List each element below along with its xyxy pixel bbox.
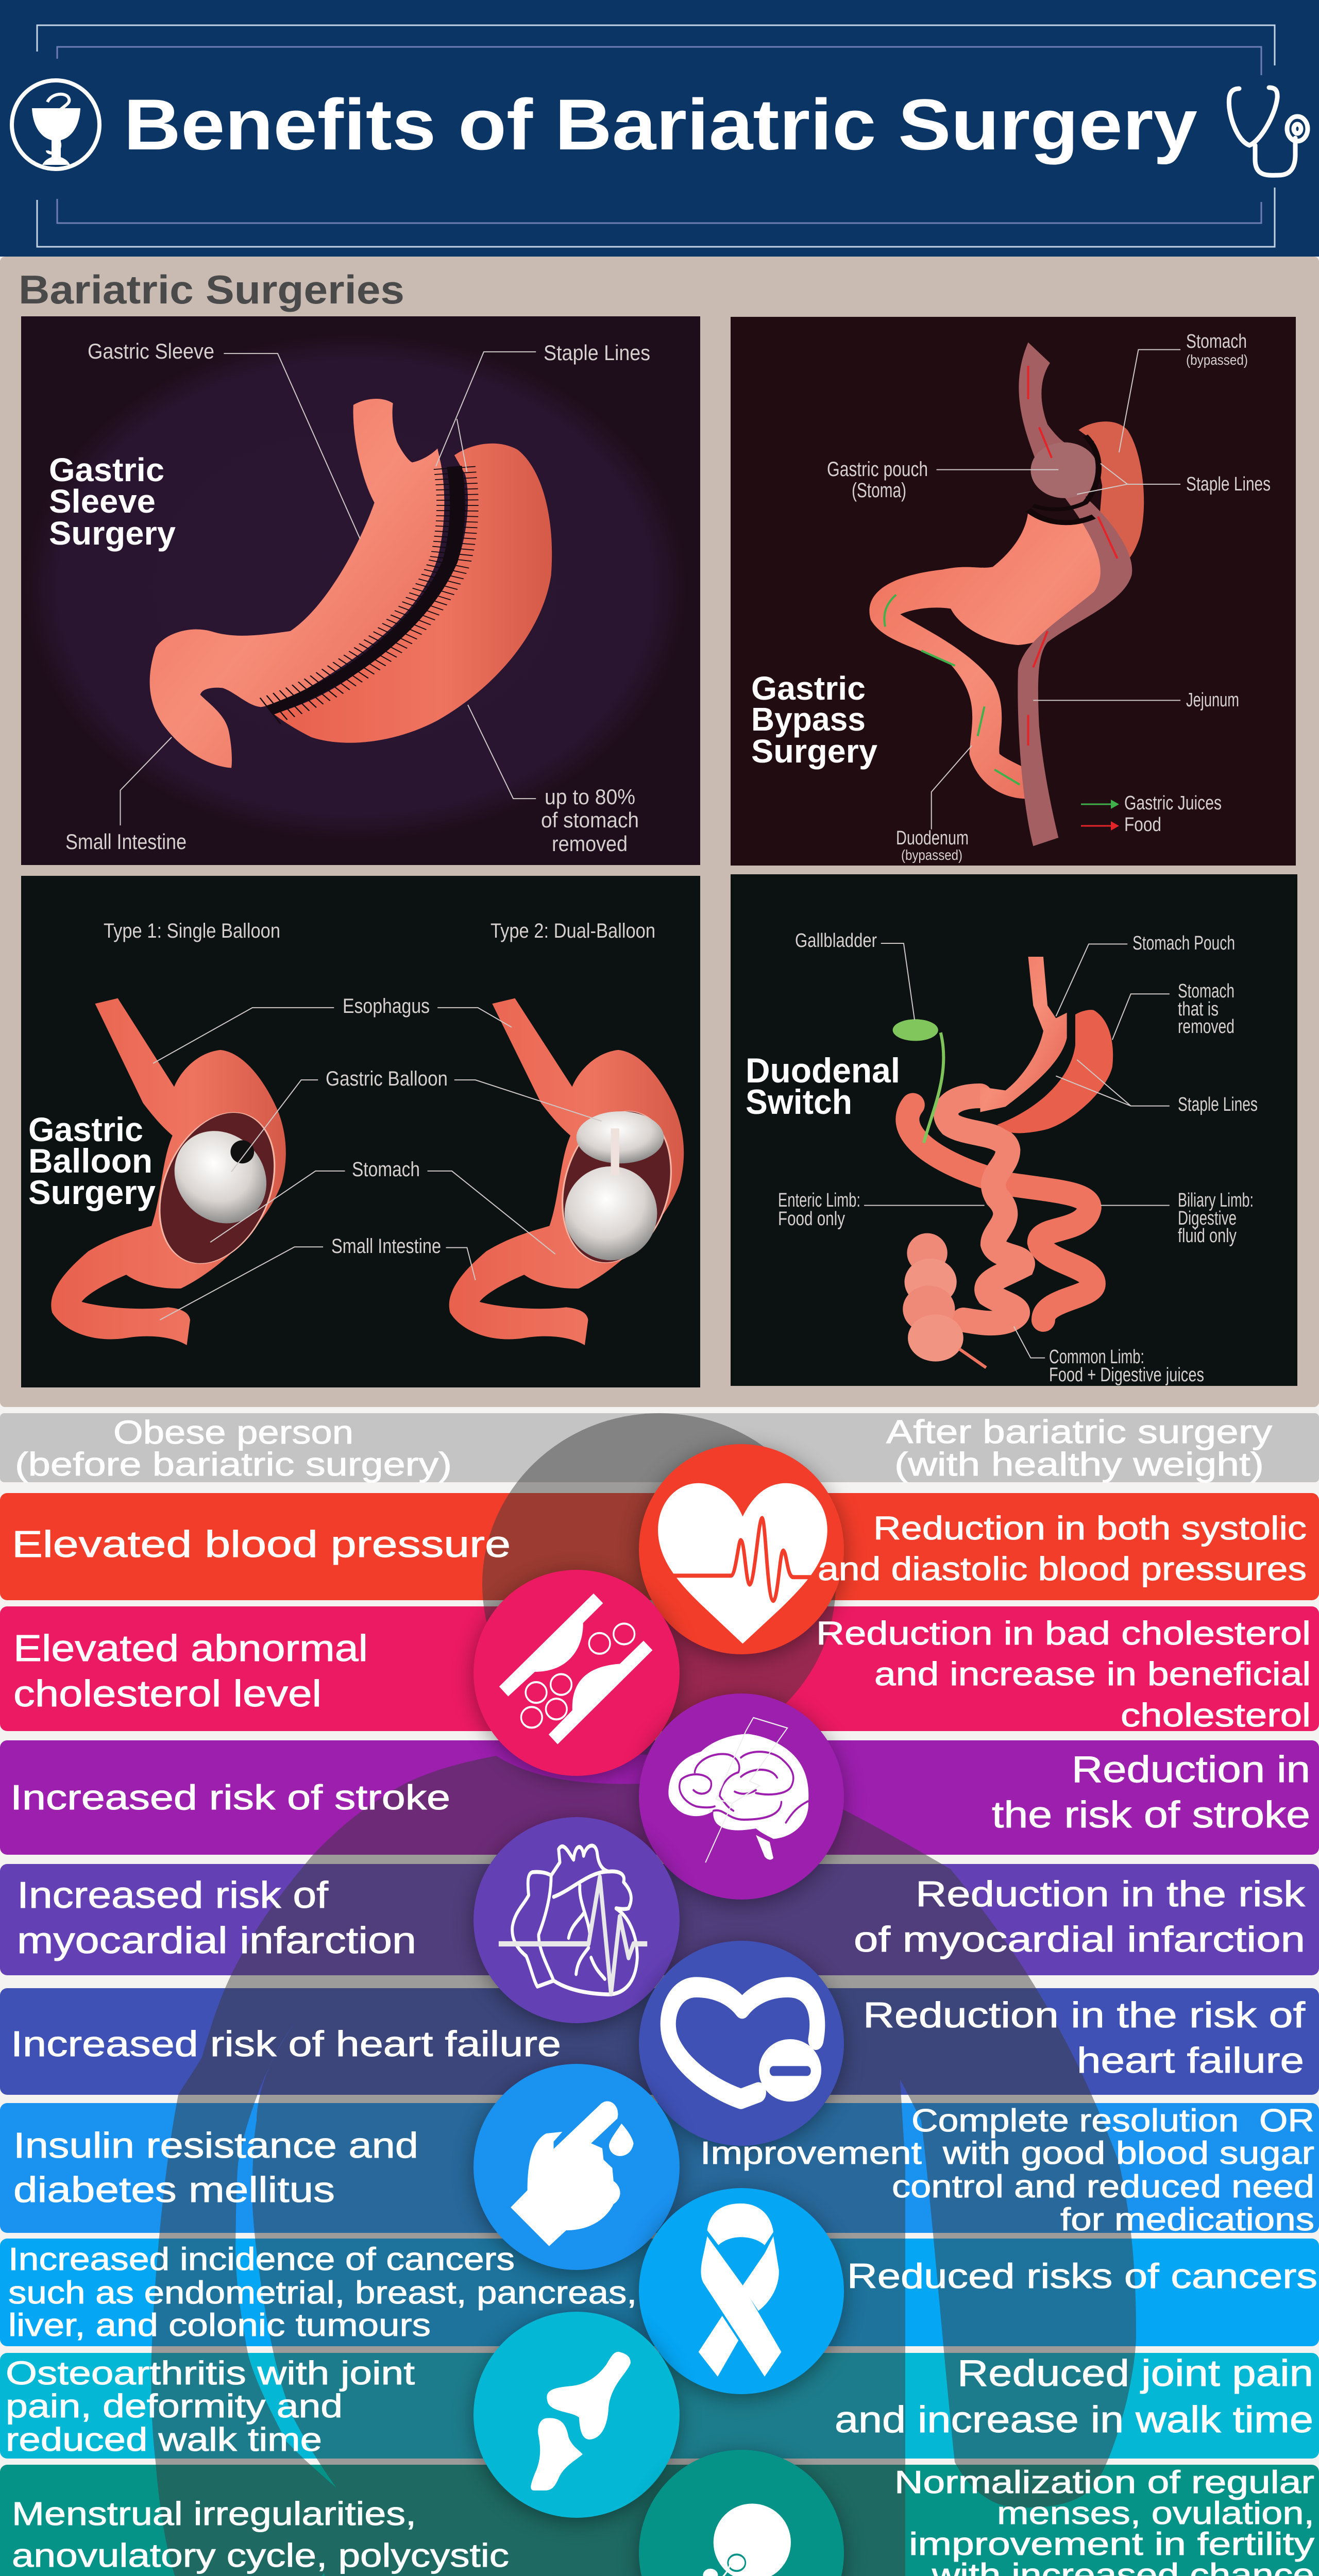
panel: gastric bypass surgery — [731, 317, 1296, 866]
column heading: obese person: (before bariatric surgery) — [15, 1446, 452, 1483]
legend: gastric juices and food — [1081, 792, 1222, 836]
icon: anatomical heart — [499, 1845, 647, 1994]
labels: sleeve: removed — [552, 832, 628, 856]
row 1: blood pressure: Elevated blood pressure — [12, 1524, 511, 1565]
heading: gastric sleeve surgery: Gastric — [49, 451, 164, 488]
callouts: duodenal leader lines — [864, 943, 1170, 1358]
icon: brain with lightning — [668, 1718, 808, 1862]
row 2: cholesterol: cholesterol level — [13, 1673, 322, 1715]
labels: duodenal switch: Enteric Limb: — [778, 1190, 860, 1211]
icon: finger prick with blood drop — [511, 2102, 634, 2246]
heading: gastric sleeve surgery — [49, 451, 176, 552]
labels: bypass: (bypassed) — [901, 847, 962, 863]
labels: bypass: Gastric pouch — [827, 458, 928, 481]
header banner — [0, 0, 1319, 257]
heading: gastric bypass surgery: Surgery — [751, 733, 877, 770]
labels: bypass: (Stoma) — [852, 479, 906, 502]
labels: balloon: Stomach — [352, 1158, 420, 1181]
title: Benefits of Bariatric Surgery — [124, 84, 1197, 165]
row 8: osteoarthritis: Osteoarthritis with joint — [6, 2354, 415, 2392]
circle: cancers — [639, 2188, 844, 2394]
circle: osteoarthritis — [474, 2312, 680, 2518]
row 6: diabetes: for medications — [1060, 2202, 1314, 2238]
row 6: diabetes: Complete resolution OR — [911, 2103, 1314, 2139]
row 9: menstrual and fertility — [12, 2465, 1314, 2576]
column heading: obese person: Obese person — [113, 1414, 353, 1451]
row 4: myocardial infarction — [17, 1874, 1306, 1961]
row 6: diabetes: Improvement with good blood sugar — [700, 2136, 1314, 2171]
circle: fertility — [639, 2450, 844, 2576]
row 8: osteoarthritis: reduced walk time — [6, 2421, 322, 2458]
panel: gastric balloon surgery — [21, 876, 700, 1387]
labels: duodenal switch: Stomach Pouch — [1132, 933, 1235, 954]
icon: heart with minus — [668, 1987, 821, 2102]
labels: bypass: Jejunum — [1186, 689, 1239, 711]
row 1: blood pressure — [12, 1510, 1307, 1587]
row 6: diabetes — [13, 2103, 1314, 2238]
row 2: cholesterol: Reduction in bad cholesterol — [816, 1615, 1311, 1652]
illustration: duodenal switch intestines — [893, 957, 1113, 1368]
circle: blood pressure — [639, 1444, 844, 1654]
circle: heart failure — [639, 1941, 844, 2146]
circle: cholesterol — [474, 1570, 680, 1776]
labels: sleeve: Gastric Sleeve — [88, 339, 214, 363]
labels: duodenal switch: Food only — [778, 1208, 845, 1230]
labels: bypass: (bypassed) — [1186, 352, 1248, 368]
circle: stroke — [639, 1693, 844, 1900]
row 2: cholesterol: Elevated abnormal — [13, 1628, 368, 1669]
heading: duodenal switch: Duodenal — [746, 1051, 900, 1090]
column heading: after bariatric surgery: After bariatric surgery — [886, 1413, 1272, 1450]
comparison column header band — [0, 1413, 1319, 1482]
heading: gastric balloon surgery — [28, 1110, 156, 1211]
row 9: menstrual and fertility: Menstrual irregularities, — [12, 2495, 416, 2532]
row 8: osteoarthritis: pain, deformity and — [6, 2387, 343, 2425]
heading: bariatric surgeries: Bariatric Surgeries — [19, 267, 404, 312]
row 5: heart failure: Reduction in the risk of — [863, 1995, 1306, 2035]
heading: gastric balloon surgery: Balloon — [28, 1142, 153, 1180]
labels: bypass: Duodenum — [896, 827, 969, 849]
row 4: myocardial infarction: myocardial infarction — [17, 1920, 416, 1961]
column heading: obese person — [15, 1414, 452, 1483]
labels: duodenal switch: Common Limb: — [1049, 1346, 1144, 1368]
labels: duodenal switch: Digestive — [1178, 1208, 1237, 1229]
icon: clogged artery — [499, 1594, 652, 1744]
illustration: sleeve stomach — [150, 399, 552, 768]
row 8: osteoarthritis — [6, 2353, 1313, 2458]
body silhouette — [151, 1413, 1136, 2576]
icon: heart with ecg — [644, 1483, 827, 1643]
labels: duodenal switch: Biliary Limb: — [1178, 1190, 1254, 1211]
row 2: cholesterol: and increase in beneficial — [874, 1655, 1311, 1692]
icon: egg and sperm — [679, 2503, 791, 2576]
row 4: myocardial infarction: Increased risk of — [17, 1875, 329, 1916]
row 9: menstrual and fertility: Normalization of regular — [894, 2465, 1314, 2500]
row 9: menstrual and fertility: menses, ovulation, — [997, 2496, 1314, 2531]
row 2: cholesterol — [13, 1615, 1311, 1734]
row 7: cancers: liver, and colonic tumours — [8, 2308, 431, 2343]
labels: sleeve: Small Intestine — [65, 829, 187, 854]
row 9: menstrual and fertility: improvement in fertility — [909, 2527, 1314, 2562]
labels: duodenal switch: Food + Digestive juices — [1049, 1364, 1204, 1386]
icon: knee joint bones — [531, 2352, 631, 2490]
heading: gastric bypass surgery — [751, 670, 877, 770]
callouts: balloon leader lines — [153, 1008, 602, 1320]
labels: sleeve: of stomach — [541, 808, 639, 832]
heading: gastric bypass surgery: Gastric — [751, 670, 866, 707]
icon: cancer ribbon — [699, 2204, 782, 2377]
row 1: blood pressure: and diastolic blood pressures — [818, 1550, 1307, 1587]
row 3: stroke — [10, 1749, 1310, 1836]
labels: bypass: Stomach — [1186, 331, 1247, 352]
row 9: menstrual and fertility: anovulatory cycle, polycystic — [12, 2537, 509, 2574]
condition circles — [474, 1444, 844, 2576]
row 7: cancers — [8, 2242, 1317, 2343]
heading: duodenal switch: Switch — [746, 1082, 852, 1122]
column heading: after bariatric surgery: (with healthy weight) — [894, 1446, 1264, 1483]
callouts: bypass leader lines — [932, 350, 1180, 829]
row 7: cancers: such as endometrial, breast, pancreas, — [8, 2275, 637, 2311]
labels: balloon: Small Intestine — [331, 1235, 441, 1258]
panel: bariatric surgeries section — [0, 257, 1319, 1407]
row 3: stroke: Increased risk of stroke — [10, 1778, 450, 1817]
labels: balloon: Gastric Balloon — [326, 1067, 448, 1090]
labels: balloon: Esophagus — [343, 995, 430, 1018]
labels: duodenal switch: fluid only — [1178, 1225, 1237, 1247]
heading: gastric sleeve surgery: Surgery — [49, 515, 176, 552]
row 8: osteoarthritis: Reduced joint pain — [957, 2353, 1313, 2394]
legend: gastric juices and food: Gastric Juices — [1124, 792, 1222, 814]
panel: duodenal switch — [731, 874, 1297, 1386]
icon: bowl of hygieia — [12, 80, 99, 169]
row 5: heart failure — [11, 1995, 1306, 2080]
row 2: cholesterol: cholesterol — [1121, 1697, 1311, 1734]
callouts: sleeve leader lines — [121, 352, 536, 825]
row 4: myocardial infarction: Reduction in the risk — [916, 1874, 1306, 1914]
row 5: heart failure: heart failure — [1077, 2040, 1304, 2080]
circle: diabetes — [474, 2064, 680, 2270]
labels: bypass — [827, 331, 1271, 863]
labels: duodenal switch: Stomach — [1178, 980, 1235, 1002]
labels: sleeve: Staple Lines — [544, 341, 650, 365]
labels: sleeve — [65, 339, 650, 856]
row 6: diabetes: control and reduced need — [892, 2169, 1314, 2205]
labels: balloon: Type 1: Single Balloon — [104, 920, 280, 942]
illustration: bypass stomach — [869, 342, 1144, 846]
condition row colour bands — [0, 1493, 1319, 2576]
labels: balloon — [104, 920, 655, 1258]
circle: myocardial infarction — [474, 1817, 680, 2023]
labels: duodenal switch: that is — [1178, 998, 1219, 1020]
row 7: cancers: Increased incidence of cancers — [8, 2242, 515, 2277]
row 4: myocardial infarction: of myocardial infarction — [854, 1919, 1305, 1959]
row 6: diabetes: Insulin resistance and — [13, 2125, 418, 2165]
labels: duodenal switch: removed — [1178, 1016, 1235, 1038]
legend: gastric juices and food: Food — [1124, 814, 1161, 836]
panel: gastric sleeve surgery — [21, 316, 700, 865]
labels: sleeve: up to 80% — [545, 785, 635, 809]
labels: duodenal switch: Gallbladder — [795, 930, 877, 952]
row 8: osteoarthritis: and increase in walk time — [835, 2399, 1313, 2441]
heading: duodenal switch — [746, 1051, 900, 1122]
heading: gastric balloon surgery: Surgery — [28, 1173, 156, 1211]
labels: duodenal switch — [778, 930, 1258, 1386]
heading: gastric balloon surgery: Gastric — [28, 1110, 143, 1148]
row 1: blood pressure: Reduction in both systolic — [873, 1510, 1307, 1547]
row 3: stroke: the risk of stroke — [992, 1794, 1310, 1836]
labels: balloon: Type 2: Dual-Balloon — [491, 920, 655, 942]
row 3: stroke: Reduction in — [1072, 1749, 1310, 1790]
row 7: cancers: Reduced risks of cancers — [847, 2257, 1317, 2296]
column heading: after bariatric surgery — [886, 1413, 1272, 1483]
row 5: heart failure: Increased risk of heart failure — [11, 2024, 561, 2064]
illustration: dual balloon stomach — [449, 998, 684, 1345]
icon: stethoscope — [1229, 88, 1308, 175]
illustration: single balloon stomach — [51, 998, 290, 1345]
heading: gastric sleeve surgery: Sleeve — [49, 483, 156, 520]
labels: duodenal switch: Staple Lines — [1178, 1094, 1258, 1115]
labels: bypass: Staple Lines — [1186, 473, 1271, 495]
heading: gastric bypass surgery: Bypass — [751, 701, 866, 738]
row 6: diabetes: diabetes mellitus — [13, 2170, 335, 2210]
